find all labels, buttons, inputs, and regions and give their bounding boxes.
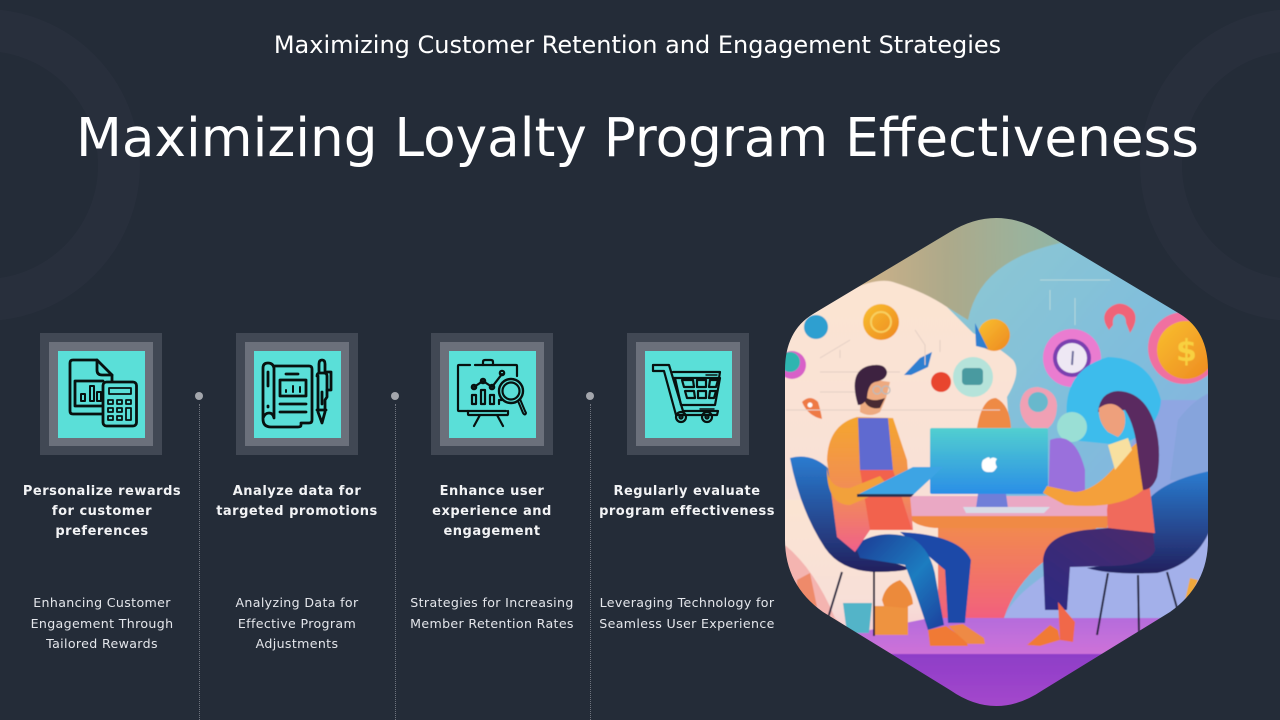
- heading: analyze data: targeted promotions: [216, 504, 378, 519]
- icon tile: file and calculator: [40, 333, 162, 455]
- timeline marker 3: [586, 392, 594, 400]
- heading: personalize rewards: for customer: [52, 504, 152, 519]
- heading: analyze data: [216, 484, 378, 519]
- description: evaluate effectiveness: [599, 595, 775, 630]
- timeline marker 1: [195, 392, 203, 400]
- monitor: [930, 428, 1050, 513]
- timeline marker 2: [391, 392, 399, 400]
- description: personalize rewards: Enhancing Customer: [33, 595, 171, 610]
- description: evaluate effectiveness: Seamless User Experience: [599, 616, 775, 630]
- boxes and bin: [797, 573, 1198, 635]
- description: analyze data: Adjustments: [256, 636, 338, 651]
- heading: evaluate effectiveness: program effectiveness: [599, 504, 775, 519]
- scene background: [785, 218, 1208, 631]
- heading: personalize rewards: preferences: [55, 524, 149, 539]
- heading: enhance experience: engagement: [443, 524, 541, 539]
- icon tile: shopping cart: [627, 333, 749, 455]
- description: enhance experience: Strategies for Increasing: [410, 595, 574, 610]
- icon tile: report book and pen: [236, 333, 358, 455]
- description: analyze data: [235, 595, 359, 651]
- woman on chair: [1027, 391, 1210, 646]
- heading: evaluate effectiveness: Regularly evaluate: [613, 484, 761, 499]
- subtitle: Maximizing Customer Retention and Engagement Strategies: [274, 31, 1001, 59]
- description: evaluate effectiveness: Leveraging Technology for: [600, 595, 774, 610]
- heading: enhance experience: experience and: [432, 504, 552, 519]
- man on chair: [790, 365, 985, 646]
- description: personalize rewards: [31, 595, 173, 651]
- heading: analyze data: Analyze data for: [233, 484, 361, 499]
- heading: enhance experience: [432, 484, 552, 539]
- title: Maximizing Loyalty Program Effectiveness: [76, 107, 1199, 169]
- description: personalize rewards: Tailored Rewards: [46, 636, 158, 651]
- heading: personalize rewards: Personalize rewards: [23, 484, 181, 499]
- description: analyze data: Analyzing Data for: [235, 595, 359, 610]
- desk: [905, 496, 1110, 618]
- floating coins and icons: [785, 279, 1208, 492]
- heading: personalize rewards: [23, 484, 181, 539]
- description: enhance experience: [410, 595, 574, 630]
- description: personalize rewards: Engagement Through: [31, 616, 173, 630]
- heading: enhance experience: Enhance user: [440, 484, 544, 499]
- floor: [856, 617, 1160, 655]
- description: enhance experience: Member Retention Rates: [410, 616, 574, 630]
- illustration: two people at a desk in a hexagon: [785, 218, 1208, 706]
- floating coins and icons: $: [1176, 334, 1197, 369]
- icon tile: presentation board with magnifier: [431, 333, 553, 455]
- heading: evaluate effectiveness: [599, 484, 775, 519]
- description: analyze data: Effective Program: [238, 616, 356, 630]
